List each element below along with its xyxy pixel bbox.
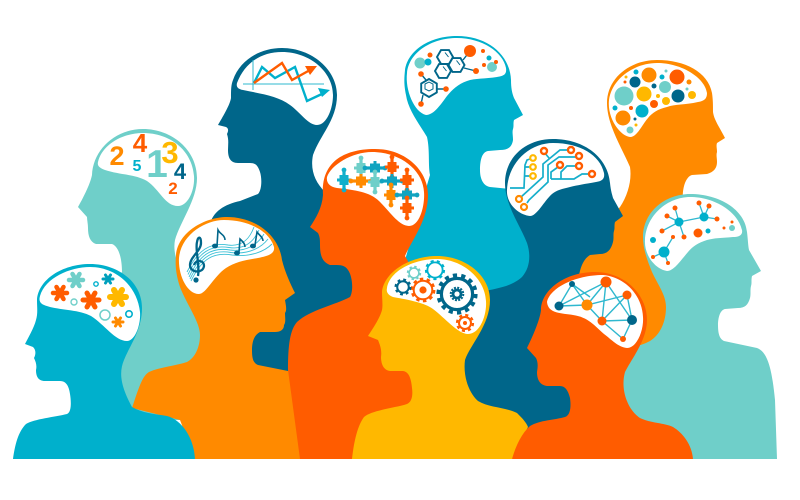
head: yellow profile with gears — [352, 256, 528, 459]
head: red-orange profile with puzzle — [288, 149, 430, 459]
numbers in the brain: 4 — [174, 159, 187, 184]
head: orange profile with coloured dots — [570, 60, 725, 345]
music staff and notes in the brain — [187, 227, 272, 283]
network in the brain — [650, 200, 735, 265]
head: dark blue profile with circuit board — [450, 139, 623, 440]
head: blue profile with flowers — [13, 264, 195, 459]
numbers in the brain: 3 — [161, 135, 179, 170]
head: teal profile with node network — [600, 194, 777, 459]
head: light blue profile with molecules — [404, 36, 540, 300]
head: dark blue profile with line chart — [210, 48, 365, 380]
head: teal profile with numbers — [78, 128, 210, 420]
circuit traces and pads in the brain — [510, 147, 595, 210]
numbers in the brain: 2 — [109, 141, 125, 171]
flowers in the brain — [53, 274, 132, 326]
graph in the brain — [554, 276, 637, 342]
numbers in the brain: 5 — [133, 158, 142, 175]
numbers in the brain — [109, 128, 187, 198]
numbers in the brain: 1 — [146, 143, 168, 186]
head: red-orange profile with graph nodes — [512, 272, 693, 459]
molecules in the brain — [414, 45, 498, 107]
head: orange profile with music — [132, 217, 311, 459]
line chart in the brain — [243, 60, 330, 101]
gears in the brain — [396, 261, 476, 331]
numbers in the brain: 4 — [133, 128, 148, 158]
numbers in the brain: 2 — [168, 179, 178, 198]
puzzle pieces in the brain — [337, 155, 419, 220]
dots in the brain — [612, 68, 696, 134]
